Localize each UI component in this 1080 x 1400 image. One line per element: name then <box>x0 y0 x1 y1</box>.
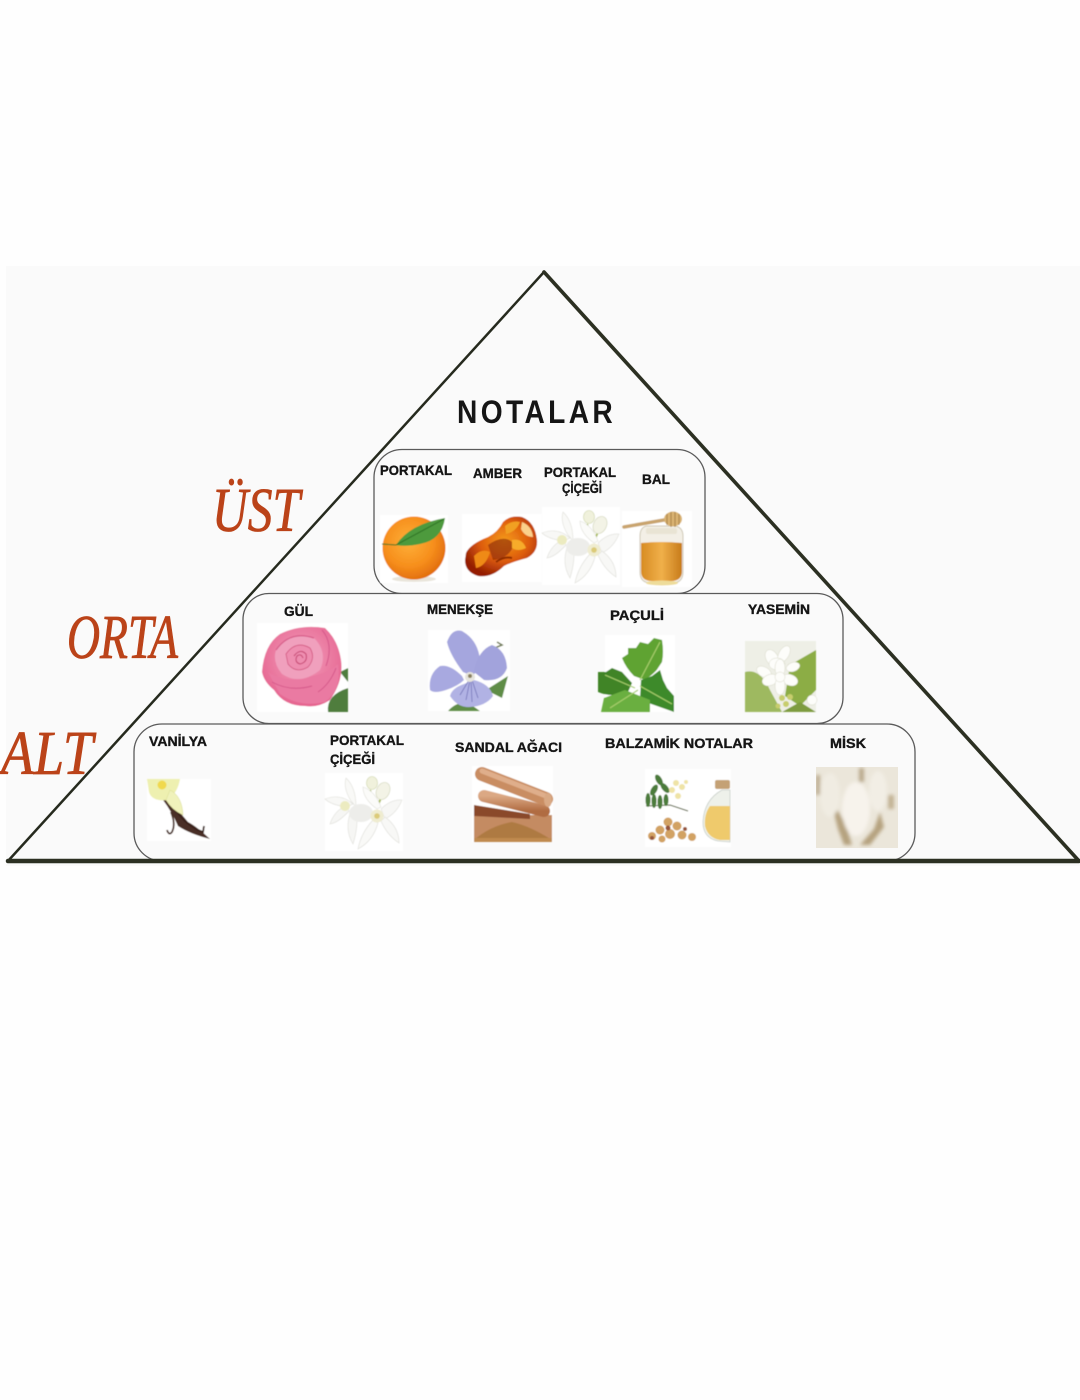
level label: alt: ALT <box>0 720 97 788</box>
icon: violet <box>428 630 510 711</box>
icon: musk <box>816 767 898 848</box>
label: paçuli: PAÇULİ <box>610 607 664 623</box>
label: portakal çiçeği: PORTAKAL <box>330 732 404 748</box>
label: portakal çiçeği <box>544 464 616 496</box>
icon: patchouli leaves <box>598 635 675 712</box>
label: sandal ağacı: SANDAL AĞACI <box>455 738 562 755</box>
icon: orange <box>380 515 448 583</box>
icon: sandalwood <box>472 766 553 842</box>
label: amber: AMBER <box>473 465 522 481</box>
panel: base notes <box>134 724 915 861</box>
label: yasemin: YASEMİN <box>748 601 810 617</box>
label: menekşe: MENEKŞE <box>427 601 493 617</box>
icon: orange blossom <box>542 507 620 585</box>
label: misk: MİSK <box>830 735 866 751</box>
icon: vanilla <box>147 779 211 841</box>
label: portakal çiçeği: PORTAKAL <box>544 464 616 480</box>
label: portakal çiçeği: ÇİÇEĞİ <box>330 750 375 767</box>
panel: top notes <box>374 450 705 594</box>
label: balzamik notalar: BALZAMİK NOTALAR <box>605 735 753 751</box>
pyramid outline <box>8 272 1079 861</box>
icon: jasmine <box>745 641 817 712</box>
pyramid base line <box>8 859 1079 863</box>
label: portakal çiçeği <box>330 732 404 767</box>
level label: üst: ÜST <box>212 477 304 545</box>
icon: rose <box>257 623 348 712</box>
label: portakal çiçeği: ÇİÇEĞİ <box>562 479 602 496</box>
level label: orta: ORTA <box>67 604 179 672</box>
icon: orange blossom <box>325 773 403 851</box>
title: NOTALAR <box>457 395 613 430</box>
icon: honey jar <box>622 511 692 587</box>
background panel <box>6 266 1080 866</box>
icon: amber stone <box>462 514 542 582</box>
label: portakal: PORTAKAL <box>380 462 452 478</box>
icon: balsamic notes <box>645 769 731 847</box>
panel: middle notes <box>243 594 843 724</box>
label: bal: BAL <box>642 471 670 487</box>
label: vanilya: VANİLYA <box>149 733 207 749</box>
label: gül: GÜL <box>284 603 313 619</box>
